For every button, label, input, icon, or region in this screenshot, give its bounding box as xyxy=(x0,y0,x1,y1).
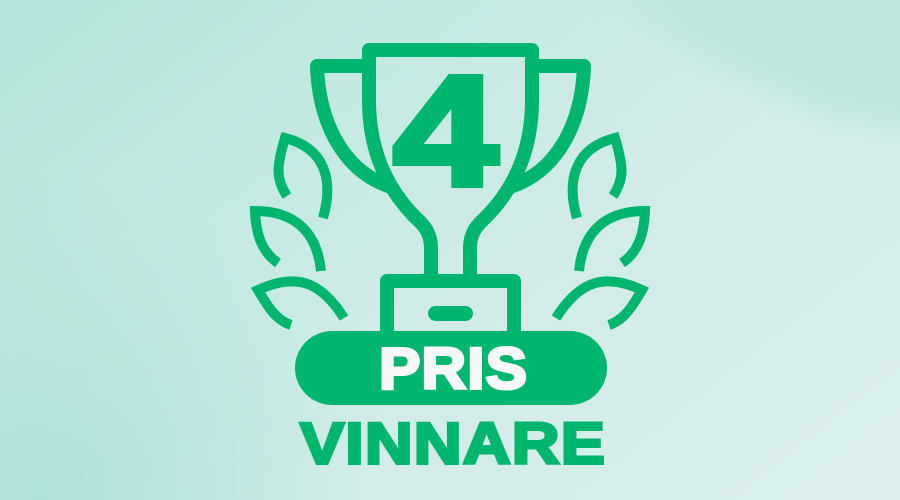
leaf top left xyxy=(278,138,327,218)
leaf bottom left xyxy=(258,281,344,325)
leaf bottom right xyxy=(556,281,642,325)
banner label PRIS: PRIS xyxy=(379,336,528,402)
left laurel xyxy=(255,138,344,325)
label VINNARE: VINNARE xyxy=(300,412,606,476)
leaf top right xyxy=(573,138,622,218)
number 4: 4 xyxy=(393,43,498,218)
trophy base xyxy=(387,281,514,331)
right handle xyxy=(510,66,584,187)
leaf middle left xyxy=(255,211,321,271)
base plate slot xyxy=(435,313,466,314)
trophy cup xyxy=(369,50,532,274)
leaf middle right xyxy=(579,211,645,271)
banner pill xyxy=(295,331,607,405)
right laurel xyxy=(556,138,645,325)
trophy xyxy=(317,50,584,331)
left handle xyxy=(317,66,391,187)
